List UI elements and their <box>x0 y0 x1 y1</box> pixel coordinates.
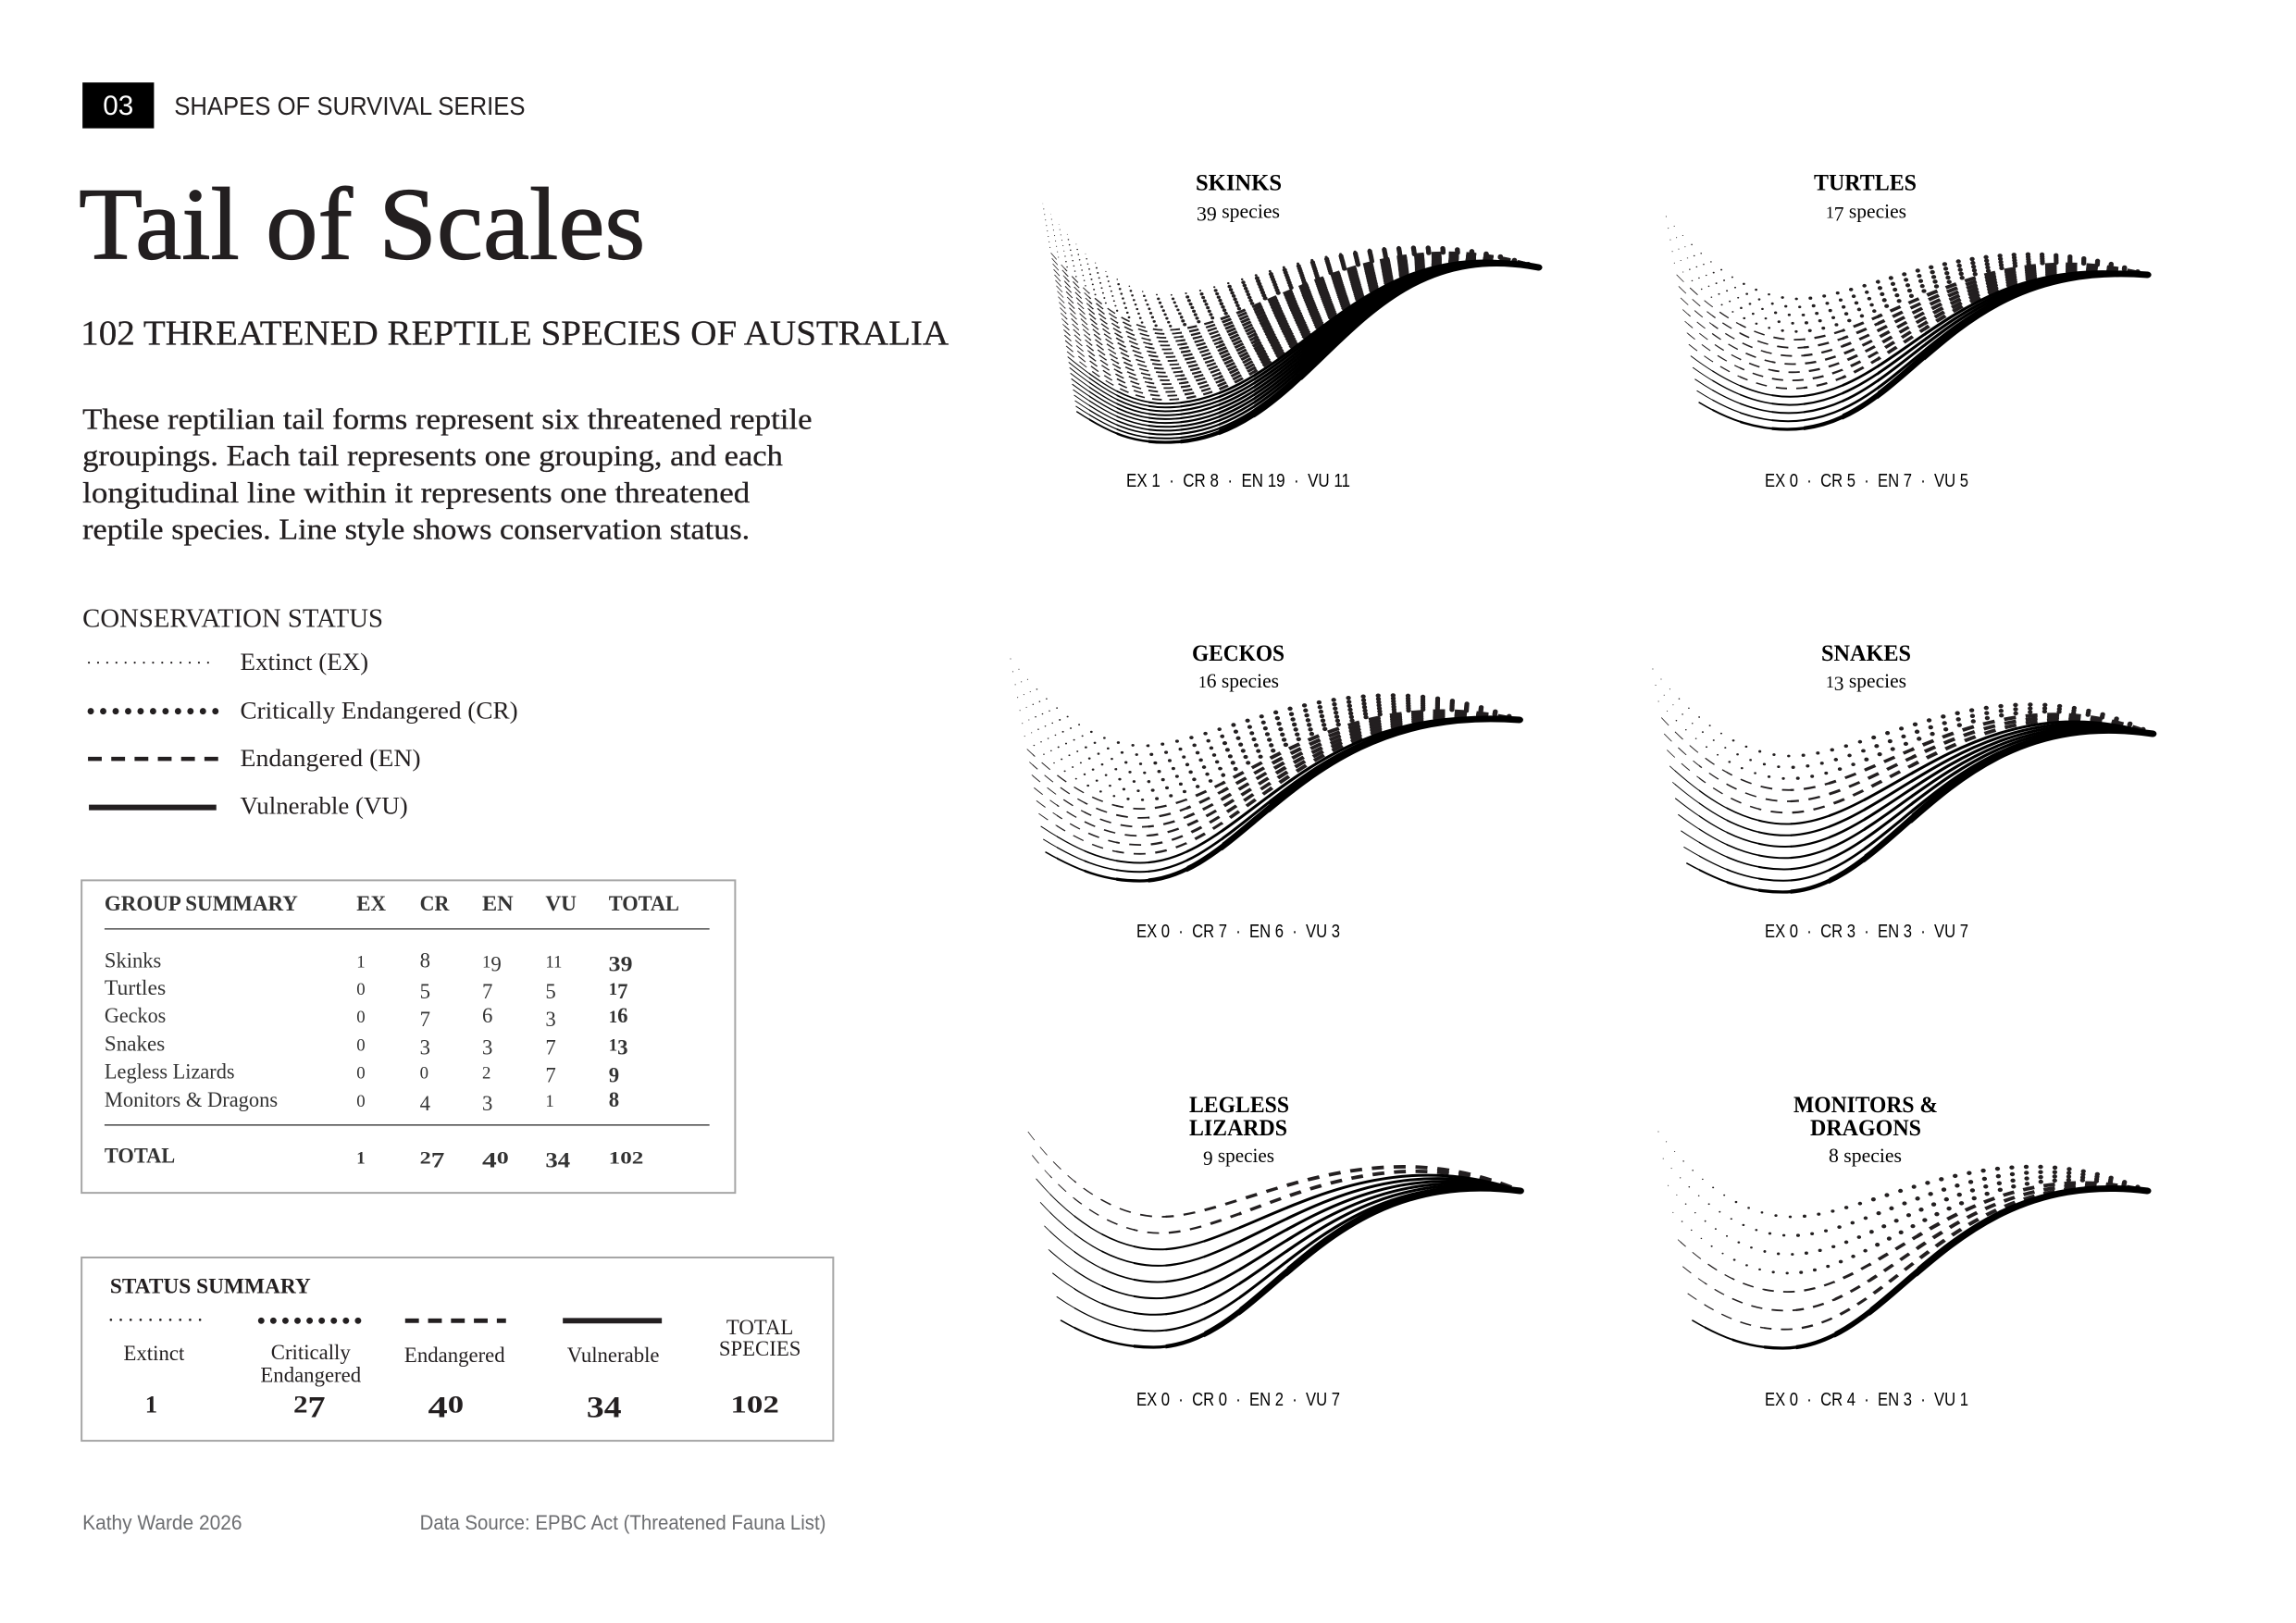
row: geckos: 0 <box>356 1008 366 1027</box>
row: geckos: 16 <box>609 1004 627 1027</box>
snakes species count: 3 <box>1834 672 1844 695</box>
footer: author: Kathy Warde 2026 <box>82 1511 242 1534</box>
row: totals: 2 <box>420 1148 431 1168</box>
legless lizards heading: LIZARDS <box>1189 1116 1287 1141</box>
panel: snakes <box>1653 641 2153 942</box>
column: extinct: 1 <box>145 1390 157 1418</box>
monitors and dragons heading: MONITORS & <box>1793 1093 1938 1118</box>
column: endangered: 0 <box>448 1390 464 1418</box>
table header: VU <box>545 892 577 915</box>
legend item: extinct: Extinct (EX) <box>241 648 368 675</box>
row: monitors and dragons: 3 <box>482 1092 492 1115</box>
row: snakes: 3 <box>482 1036 492 1059</box>
row: skinks: 9 <box>490 952 502 975</box>
column: endangered <box>404 1320 506 1424</box>
turtles heading: TURTLES <box>1814 170 1917 196</box>
row: turtles: 5 <box>420 980 430 1003</box>
column: total species: 102 <box>730 1390 779 1418</box>
legless lizards heading: LEGLESS <box>1189 1093 1289 1118</box>
row: turtles: 0 <box>356 980 366 999</box>
geckos species count: 16 species <box>1198 669 1279 692</box>
panel: geckos <box>1011 641 1520 942</box>
status summary heading: STATUS SUMMARY <box>110 1275 311 1298</box>
row: snakes: 1 <box>609 1036 617 1056</box>
row: skinks: 11 <box>545 952 562 972</box>
skinks status counts: EX 1 · CR 8 · EN 19 · VU 11 <box>1126 471 1350 491</box>
intro paragraph: These reptilian tail forms represent six threatened reptile <box>82 403 813 436</box>
column: total species: TOTAL <box>726 1316 793 1339</box>
row: totals: 34 <box>545 1148 570 1171</box>
row: totals: 1 <box>356 1148 366 1168</box>
row: legless lizards: 2 <box>482 1063 490 1083</box>
geckos heading: GECKOS <box>1192 641 1285 666</box>
panel: monitors and dragons <box>1658 1093 2147 1410</box>
legend item: critically endangered: Critically Endangered (CR) <box>241 697 518 725</box>
column: vulnerable: Vulnerable <box>567 1344 660 1367</box>
monitors and dragons heading: DRAGONS <box>1810 1116 1921 1141</box>
row: monitors and dragons: 0 <box>356 1092 366 1111</box>
row: snakes: Snakes <box>105 1033 165 1056</box>
row: turtles <box>105 976 627 1003</box>
column: critically endangered: 7 <box>308 1391 326 1424</box>
row: totals: 102 <box>609 1148 643 1168</box>
row: monitors and dragons <box>105 1088 619 1115</box>
row: turtles: 1 <box>609 980 617 999</box>
row: monitors and dragons: 4 <box>420 1092 431 1115</box>
monitors and dragons heading <box>1793 1093 1938 1141</box>
row: geckos: Geckos <box>105 1004 166 1027</box>
row: skinks <box>105 948 632 975</box>
column: total species: SPECIES <box>719 1337 800 1360</box>
intro paragraph: reptile species. Line style shows conservation status. <box>82 513 750 545</box>
column: extinct: Extinct <box>124 1342 185 1365</box>
row: legless lizards: 0 <box>356 1063 366 1083</box>
row: geckos <box>105 1004 627 1031</box>
panel: group summary table <box>81 880 735 1193</box>
left column <box>79 82 949 1534</box>
legend item: vulnerable: Vulnerable (VU) <box>241 792 408 820</box>
row: turtles: Turtles <box>105 976 166 999</box>
legless lizards heading <box>1189 1093 1289 1141</box>
row: snakes <box>105 1033 627 1059</box>
table header: CR <box>420 892 450 915</box>
snakes heading: SNAKES <box>1821 641 1911 666</box>
column: endangered: Endangered <box>404 1344 505 1367</box>
row: monitors and dragons: 8 <box>609 1088 619 1111</box>
row: legless lizards: 0 <box>420 1063 428 1083</box>
row: geckos: 7 <box>420 1008 430 1031</box>
skinks species count: 39 <box>1197 202 1217 226</box>
row: snakes: 3 <box>617 1036 627 1059</box>
row: legless lizards <box>105 1059 619 1086</box>
row: skinks: Skinks <box>105 948 161 972</box>
snakes species count: species <box>1844 669 1906 692</box>
row: legless lizards: Legless Lizards <box>105 1059 235 1083</box>
table header: GROUP SUMMARY <box>105 892 298 915</box>
column: total species <box>719 1316 800 1418</box>
row: monitors and dragons: 1 <box>545 1092 554 1111</box>
monitors and dragons status counts: EX 0 · CR 4 · EN 3 · VU 1 <box>1765 1390 1968 1410</box>
intro paragraph <box>82 403 813 545</box>
geckos status counts: EX 0 · CR 7 · EN 6 · VU 3 <box>1136 922 1340 942</box>
panel: legless lizards <box>1028 1093 1520 1410</box>
column: vulnerable <box>563 1320 662 1424</box>
column: critically endangered: Critically <box>271 1341 351 1364</box>
table header: EN <box>482 892 514 915</box>
tail: monitors and dragons <box>1658 1132 2147 1348</box>
table header: EX <box>356 892 387 915</box>
legend item: endangered: Endangered (EN) <box>241 744 421 772</box>
row: turtles: 7 <box>617 980 627 1003</box>
row: skinks: 1 <box>482 952 490 972</box>
table header <box>105 892 679 915</box>
series label: SHAPES OF SURVIVAL SERIES <box>174 92 526 120</box>
row: legless lizards: 7 <box>545 1063 556 1086</box>
panel: turtles <box>1666 170 2147 491</box>
snakes status counts: EX 0 · CR 3 · EN 3 · VU 7 <box>1765 922 1968 942</box>
legless lizards species count: 9 <box>1203 1146 1213 1170</box>
skinks species count: species <box>1217 200 1280 222</box>
row: turtles: 5 <box>545 980 556 1003</box>
tail: legless lizards <box>1028 1132 1520 1347</box>
snakes species count: 1 <box>1826 673 1834 691</box>
monitors and dragons species count: 8 species <box>1829 1144 1902 1167</box>
turtles species count: 1 <box>1826 204 1834 222</box>
table header: TOTAL <box>609 892 679 915</box>
column: critically endangered <box>260 1320 362 1424</box>
row: monitors and dragons: Monitors & Dragons <box>105 1088 278 1111</box>
row: skinks: 39 <box>609 952 632 975</box>
series badge: 03 <box>103 91 133 121</box>
column: vulnerable: 34 <box>587 1391 622 1424</box>
subtitle: 102 THREATENED REPTILE SPECIES OF AUSTRALIA <box>81 314 949 353</box>
row: totals: 4 <box>482 1148 492 1171</box>
row: skinks: 8 <box>420 948 430 972</box>
row: totals: 0 <box>497 1148 509 1168</box>
row: geckos: 3 <box>545 1008 556 1031</box>
series badge <box>82 82 154 129</box>
footer: data source: Data Source: EPBC Act (Threatened Fauna List) <box>420 1511 825 1534</box>
row: turtles: 7 <box>482 980 492 1003</box>
legend: conservation status <box>82 604 518 820</box>
row: skinks: 1 <box>356 952 366 972</box>
row: snakes: 0 <box>356 1036 366 1056</box>
turtles species count: species <box>1844 200 1906 222</box>
skinks heading: SKINKS <box>1196 170 1282 196</box>
row: legless lizards: 9 <box>609 1063 619 1086</box>
tail: turtles <box>1666 217 2147 429</box>
tail: geckos <box>1011 659 1520 881</box>
legend heading: CONSERVATION STATUS <box>82 604 383 634</box>
column: critically endangered: Endangered <box>260 1364 362 1387</box>
legless lizards status counts: EX 0 · CR 0 · EN 2 · VU 7 <box>1136 1390 1340 1410</box>
tail: skinks <box>1043 204 1538 442</box>
turtles status counts: EX 0 · CR 5 · EN 7 · VU 5 <box>1765 471 1968 491</box>
row: totals: TOTAL <box>105 1144 175 1167</box>
row: totals <box>105 1144 643 1171</box>
turtles species count: 7 <box>1834 202 1844 226</box>
row: snakes: 3 <box>420 1036 430 1059</box>
column: endangered: 4 <box>428 1391 443 1424</box>
row: totals: 7 <box>431 1148 444 1171</box>
panel: skinks <box>1043 170 1538 491</box>
title: Tail of Scales <box>79 167 645 280</box>
panel: status summary <box>81 1258 833 1441</box>
legless lizards species count: species <box>1213 1144 1274 1167</box>
column: extinct <box>111 1319 203 1418</box>
row: snakes: 7 <box>545 1036 556 1059</box>
intro paragraph: groupings. Each tail represents one grouping, and each <box>82 440 783 472</box>
row: geckos: 6 <box>482 1004 492 1027</box>
tail: snakes <box>1653 669 2153 892</box>
column: critically endangered: 2 <box>293 1390 308 1418</box>
intro paragraph: longitudinal line within it represents one threatened <box>82 477 750 509</box>
